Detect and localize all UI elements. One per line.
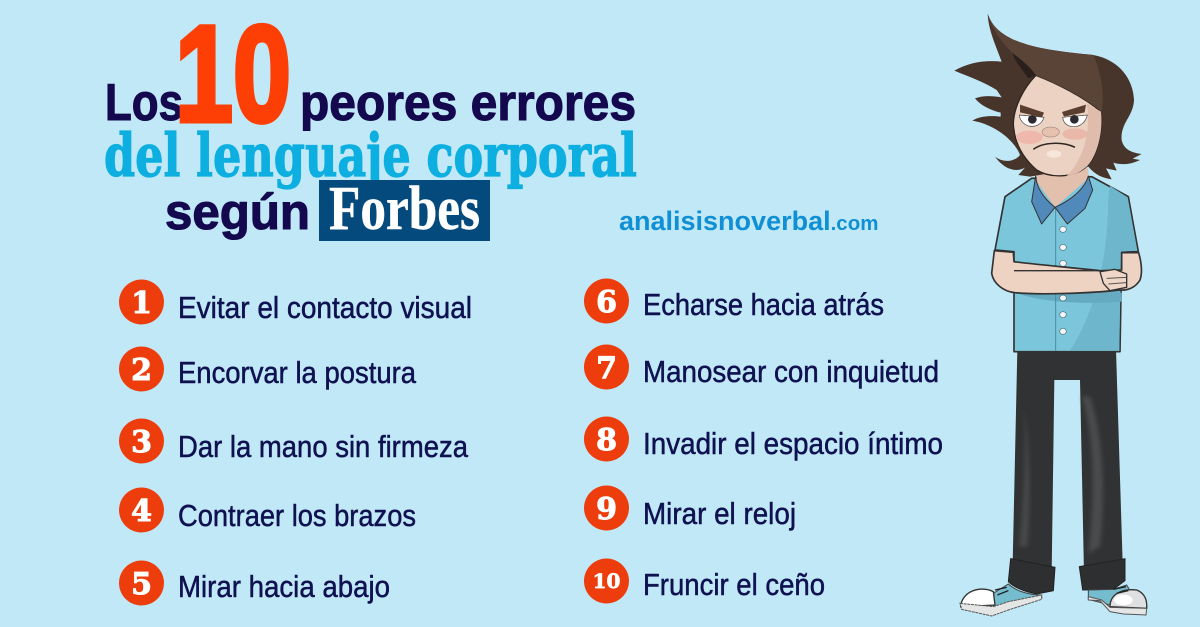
left cuff [1008, 559, 1055, 594]
hair [954, 13, 1142, 179]
item 9: Mirar el reloj [643, 496, 796, 531]
item 5: Mirar hacia abajo [178, 569, 390, 604]
title: según: según [165, 184, 310, 240]
item 1: Evitar el contacto visual [178, 290, 472, 325]
title: del lenguaje corporal: del lenguaje corporal [104, 121, 637, 190]
mouth [1033, 143, 1075, 149]
character illustration [954, 13, 1147, 616]
Forbes logo box: Forbes [329, 175, 480, 243]
eyebrows [1020, 105, 1044, 117]
cheeks [1016, 131, 1043, 144]
list: right column [584, 278, 943, 604]
face [1013, 75, 1101, 176]
item 9: 9 [596, 492, 617, 527]
item 2 [119, 346, 417, 392]
right cuff [1079, 559, 1125, 590]
item 6 [584, 278, 884, 324]
left shoe [960, 584, 1042, 616]
placket [1054, 207, 1057, 351]
eyes [1019, 115, 1044, 126]
collar [1032, 176, 1093, 224]
pants [1008, 350, 1125, 594]
item 3: 3 [131, 425, 152, 460]
item 5: 5 [131, 567, 152, 602]
arms crossed [992, 251, 1141, 294]
item 10: Fruncir el ceño [643, 567, 825, 602]
shirt shading [1070, 186, 1137, 351]
item 2: 2 [131, 353, 152, 388]
item 3: Dar la mano sin firmeza [178, 429, 469, 464]
title: big number 10: 10 [175, 0, 291, 151]
item 7: 7 [596, 351, 617, 386]
list: left column [119, 280, 472, 606]
hand [1100, 269, 1127, 291]
back hair [954, 13, 1142, 179]
title: Los: Los [105, 74, 183, 132]
shirt [995, 177, 1138, 352]
item 9 [584, 486, 796, 531]
item 1 [119, 280, 472, 325]
item 7: Manosear con inquietud [643, 354, 939, 389]
item 6: Echarse hacia atrás [643, 287, 884, 322]
item 10: 10 [593, 569, 620, 593]
item 4 [119, 488, 416, 533]
shadow on face side [1067, 103, 1101, 176]
item 8 [584, 416, 943, 462]
item 6: 6 [596, 285, 617, 320]
neck [1037, 168, 1088, 207]
item 8: 8 [596, 423, 617, 458]
item 8: Invadir el espacio íntimo [643, 426, 943, 461]
item 4: Contraer los brazos [178, 498, 416, 533]
buttons [1060, 226, 1066, 334]
item 10 [584, 558, 825, 604]
right shoe [1088, 585, 1147, 615]
website url: analisisnoverbal.com [619, 206, 878, 236]
title: peores errores: peores errores [300, 74, 636, 131]
item 1: 1 [131, 286, 152, 321]
title [104, 0, 637, 243]
hair fringe shadow [1013, 53, 1036, 78]
item 7 [584, 344, 939, 390]
item 4: 4 [131, 494, 152, 529]
item 5 [119, 560, 390, 606]
item 2: Encorvar la postura [178, 355, 417, 390]
item 3 [119, 418, 469, 464]
nose [1042, 127, 1059, 137]
front hair [988, 13, 1103, 112]
